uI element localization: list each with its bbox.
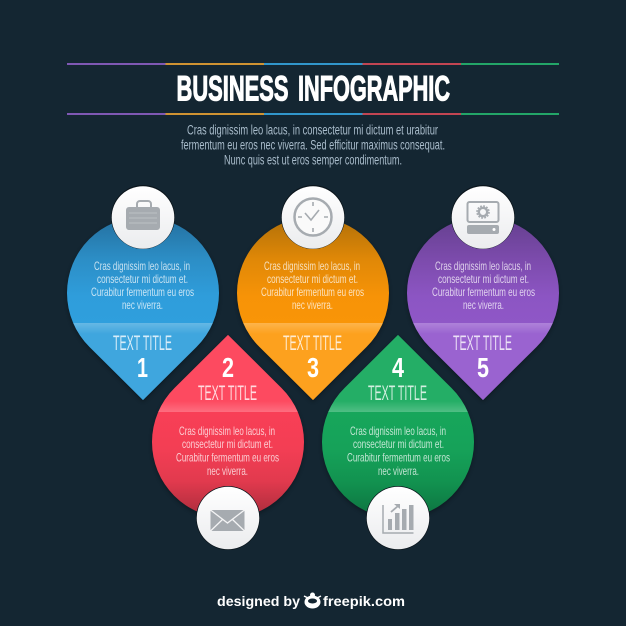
panel 1: blue drop (67, 224, 219, 400)
text: panel 1 body: Cras dignissim leo lacus, in (94, 259, 190, 273)
number 5: 5 (477, 352, 489, 383)
icon: briefcase (111, 185, 175, 249)
text: panel 1 body: consectetur mi dictum et. (97, 272, 188, 286)
text: panel 3 body: nec viverra. (292, 298, 333, 312)
text: panel 2 body: nec viverra. (207, 464, 248, 478)
panel 5: purple drop: TEXT TITLE (453, 331, 512, 355)
text: panel 1 body: Curabitur fermentum eu eros (91, 285, 194, 299)
title: INFOGRAPHIC (298, 70, 450, 108)
text: panel 4 body: consectetur mi dictum et. (353, 437, 444, 451)
number 4: 4 (392, 352, 404, 383)
number 2: 2 (222, 352, 234, 383)
text: panel 5 body: Curabitur fermentum eu eros (432, 285, 535, 299)
text: panel 5 body (432, 259, 535, 312)
icon: envelope (196, 486, 260, 550)
text: panel 3 body (261, 259, 364, 312)
text: panel 2 body (176, 424, 279, 478)
footer credit: freepik.com (323, 593, 405, 609)
panel 1: blue drop: TEXT TITLE (113, 331, 172, 355)
icon: computer with gear (451, 185, 515, 249)
text: panel 1 body: nec viverra. (122, 298, 163, 312)
text: panel 2 body: Curabitur fermentum eu eros (176, 450, 279, 464)
text: panel 1 body (91, 259, 194, 312)
intro text: Nunc quis est ut eros semper condimentum. (224, 152, 402, 168)
footer credit (217, 592, 405, 609)
top header rule (67, 63, 559, 65)
intro text: Cras dignissim leo lacus, in consectetur mi dictum et urabitur (187, 122, 438, 138)
icon: bar chart (366, 486, 430, 550)
bottom header rule (67, 113, 559, 115)
intro text (181, 122, 445, 168)
text: panel 4 body: Curabitur fermentum eu eros (347, 450, 450, 464)
title: BUSINESS (176, 70, 288, 108)
panel 3: orange drop (237, 224, 389, 400)
text: panel 5 body: nec viverra. (463, 298, 504, 312)
text: panel 2 body: consectetur mi dictum et. (182, 437, 273, 451)
text: panel 3 body: Curabitur fermentum eu eros (261, 285, 364, 299)
panel 4: green drop: TEXT TITLE (368, 381, 427, 405)
text: panel 3 body: consectetur mi dictum et. (267, 272, 358, 286)
text: panel 5 body: consectetur mi dictum et. (438, 272, 529, 286)
panel 5: purple drop (407, 224, 559, 400)
title (176, 70, 450, 108)
panel 3: orange drop: TEXT TITLE (283, 331, 342, 355)
panel 2: red drop (152, 335, 304, 512)
text: panel 3 body: Cras dignissim leo lacus, in (264, 259, 360, 273)
number 3: 3 (307, 352, 319, 383)
text: panel 4 body: nec viverra. (378, 464, 419, 478)
text: panel 2 body: Cras dignissim leo lacus, in (179, 424, 275, 438)
panel 2: red drop: TEXT TITLE (198, 381, 257, 405)
panel 4: green drop (322, 335, 474, 512)
number 1: 1 (137, 352, 148, 383)
text: panel 4 body: Cras dignissim leo lacus, in (350, 424, 446, 438)
footer credit: designed by (217, 593, 300, 609)
intro text: fermentum eu eros nec viverra. Sed efficitur maximus consequat. (181, 138, 445, 152)
text: panel 5 body: Cras dignissim leo lacus, in (435, 259, 531, 273)
text: panel 4 body (347, 424, 450, 478)
icon: freepik mascot (304, 592, 321, 608)
icon: clock (281, 185, 345, 249)
